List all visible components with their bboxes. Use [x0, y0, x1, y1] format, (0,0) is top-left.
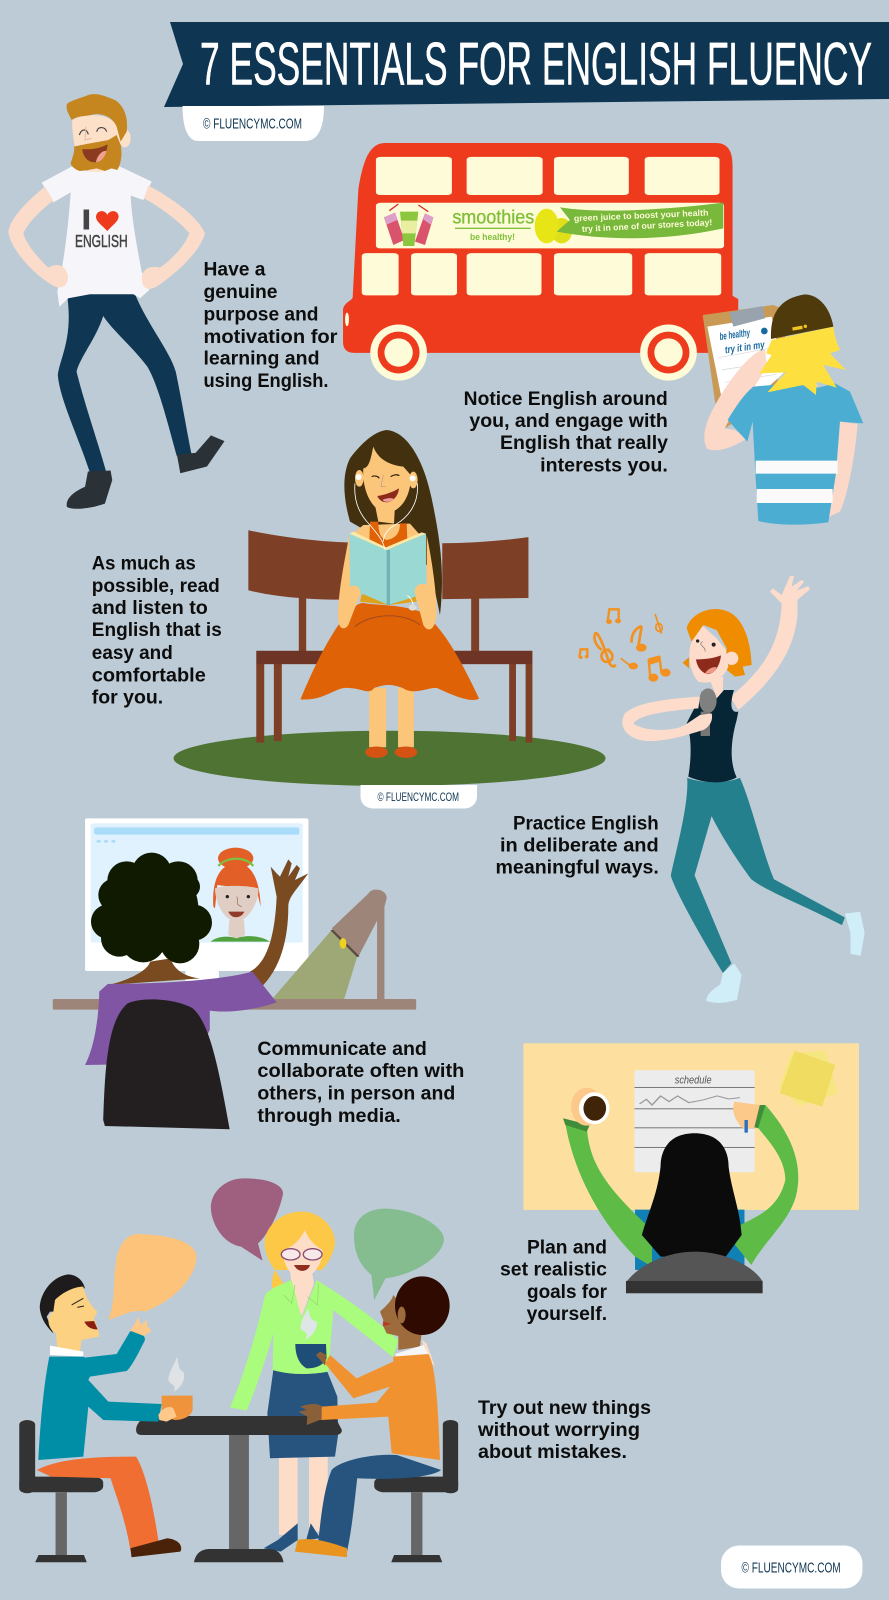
- singer: upper body, microphone and music notes: [579, 576, 810, 782]
- caption 2: English that really: [500, 433, 668, 454]
- caption 4: Practice English: [513, 814, 659, 834]
- singer: trousers and shoes: [671, 778, 865, 1003]
- man in orange sweater: [298, 1276, 450, 1460]
- illustration: person with clipboard: try it in my: [724, 340, 766, 356]
- bus ad: smoothies: be healthy!: [470, 232, 515, 242]
- watermark pill top: [182, 106, 324, 141]
- watermark pill top: © FLUENCYMC.COM: [203, 116, 302, 132]
- caption 1: Have a: [204, 260, 266, 280]
- caption 6: goals for: [527, 1282, 608, 1303]
- caption 3: and listen to: [92, 598, 208, 619]
- bus ad: smoothies: green juice to boost your health: [574, 207, 709, 223]
- illustration: person with clipboard: be healthy: [719, 328, 752, 343]
- man: upper body and laughing face: [8, 94, 205, 307]
- caption 3: As much as: [92, 554, 196, 575]
- caption 1: motivation for: [204, 327, 338, 348]
- man: upper body and laughing face: I: [81, 204, 92, 236]
- caption 2: interests you.: [540, 456, 668, 476]
- caption 4: in deliberate and: [500, 836, 659, 857]
- caption 5: [257, 1039, 464, 1127]
- caption 4: meaningful ways.: [496, 858, 659, 878]
- caption 6: yourself.: [527, 1304, 607, 1325]
- illustration: girl reading on a bench: [174, 430, 606, 786]
- caption 2: you, and engage with: [469, 411, 668, 432]
- caption 5: others, in person and: [257, 1084, 455, 1105]
- caption 1: genuine: [204, 282, 278, 303]
- caption 3: English that is: [92, 620, 222, 641]
- person on screen, curly hair and waving arm: [91, 848, 308, 988]
- caption 5: through media.: [257, 1106, 401, 1127]
- bus ad: smoothies: try it in one of our stores today!: [582, 217, 713, 234]
- caption 2: Notice English around: [464, 389, 668, 410]
- caption 7: Try out new things: [478, 1398, 651, 1419]
- caption 1: [204, 260, 338, 392]
- purple top and chair: [85, 972, 277, 1129]
- standing woman with glasses: [230, 1212, 435, 1458]
- man: trousers and shoes: [58, 294, 225, 509]
- monitor, lamp and desk: [53, 818, 416, 1010]
- bench, ground, skirt and legs: [174, 530, 606, 786]
- caption 1: using English.: [204, 371, 328, 392]
- caption 3: easy and: [92, 643, 173, 664]
- caption 3: [92, 554, 222, 709]
- watermark pill bottom: © FLUENCYMC.COM: [742, 1560, 841, 1577]
- watermark pill middle: [360, 785, 477, 808]
- bus ad: smoothies: [384, 203, 723, 246]
- illustration: singing woman with music notes: [579, 576, 865, 1003]
- caption 7: without worrying: [477, 1420, 640, 1441]
- watermark pill bottom: [721, 1546, 862, 1588]
- illustration: three friends talking at a cafe table: [19, 1178, 458, 1562]
- caption 3: comfortable: [92, 665, 206, 686]
- caption 5: collaborate often with: [257, 1061, 464, 1082]
- girl: head, hair, book and arms: [338, 430, 442, 629]
- caption 1: learning and: [204, 348, 320, 370]
- caption 7: [477, 1398, 651, 1463]
- caption 6: [500, 1237, 608, 1325]
- man: upper body and laughing face: ENGLISH: [75, 231, 128, 251]
- illustration: happy man in I love English shirt: [8, 94, 225, 509]
- watermark pill middle: © FLUENCYMC.COM: [378, 790, 459, 804]
- illustration: planning at a desk with schedule: [523, 1043, 859, 1293]
- caption 1: purpose and: [204, 304, 318, 326]
- illustration: red double-decker bus: [343, 143, 738, 381]
- caption 5: Communicate and: [257, 1039, 427, 1060]
- illustration: person with clipboard: [703, 294, 863, 525]
- caption 6: set realistic: [500, 1259, 607, 1280]
- man in teal sweater with coffee: [38, 1274, 193, 1460]
- caption 7: about mistakes.: [478, 1442, 627, 1463]
- table and the seated men's legs: [37, 1416, 441, 1562]
- speech bubbles, chairs and woman's legs: [19, 1178, 458, 1562]
- bus ad: smoothies: smoothies: [452, 207, 534, 228]
- caption 4: [496, 814, 659, 878]
- caption 6: Plan and: [527, 1237, 607, 1258]
- caption 3: for you.: [92, 688, 163, 709]
- caption 2: [464, 389, 668, 476]
- illustration: video call at a desk: [53, 818, 416, 1129]
- illustration: planning at a desk with schedule: schedule: [675, 1074, 712, 1086]
- caption 3: possible, read: [92, 576, 220, 597]
